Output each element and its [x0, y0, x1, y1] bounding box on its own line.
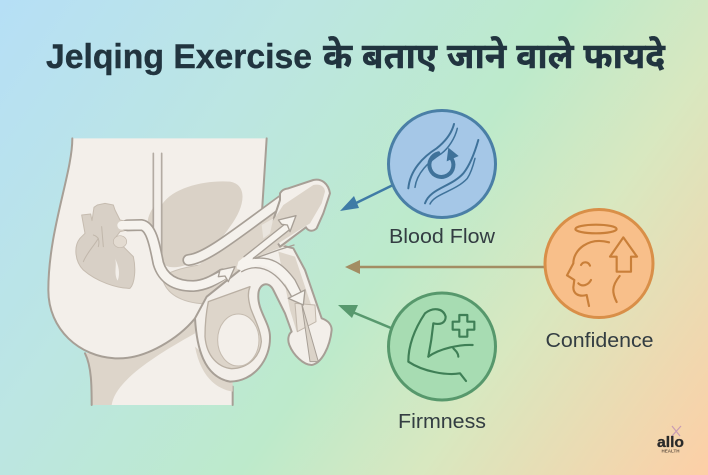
icon: logo spark [672, 426, 681, 436]
icon: flexed arm with plus [388, 293, 496, 400]
logo: allo [657, 435, 684, 451]
upper shaft [188, 180, 330, 268]
arrow: confidence [345, 260, 546, 274]
icon: head with halo and up arrow [545, 210, 653, 318]
logo [657, 426, 684, 454]
pelvic floor [163, 263, 253, 304]
bladder [162, 181, 243, 267]
spine lines [153, 153, 162, 260]
arrow: blood flow [340, 185, 393, 211]
title [46, 36, 666, 76]
scrotum and lower shaft [195, 243, 332, 382]
panel: blood flow [388, 110, 496, 248]
label: confidence: Confidence [546, 330, 654, 352]
title: Jelqing Exercise [46, 38, 312, 76]
flow arrows [218, 216, 305, 305]
panel: confidence [545, 210, 654, 352]
label: firmness: Firmness [398, 411, 486, 433]
icon: blood vessel [388, 110, 496, 218]
leg [85, 318, 233, 405]
panel: firmness [388, 293, 496, 433]
anatomy diagram [48, 138, 332, 405]
title: के बताए जाने वाले फायदे [323, 36, 666, 76]
heart [76, 203, 135, 288]
arrow: firmness [338, 305, 391, 328]
logo: HEALTH [662, 448, 680, 454]
artery [122, 225, 227, 286]
torso [48, 138, 267, 358]
label: blood flow: Blood Flow [389, 226, 496, 248]
